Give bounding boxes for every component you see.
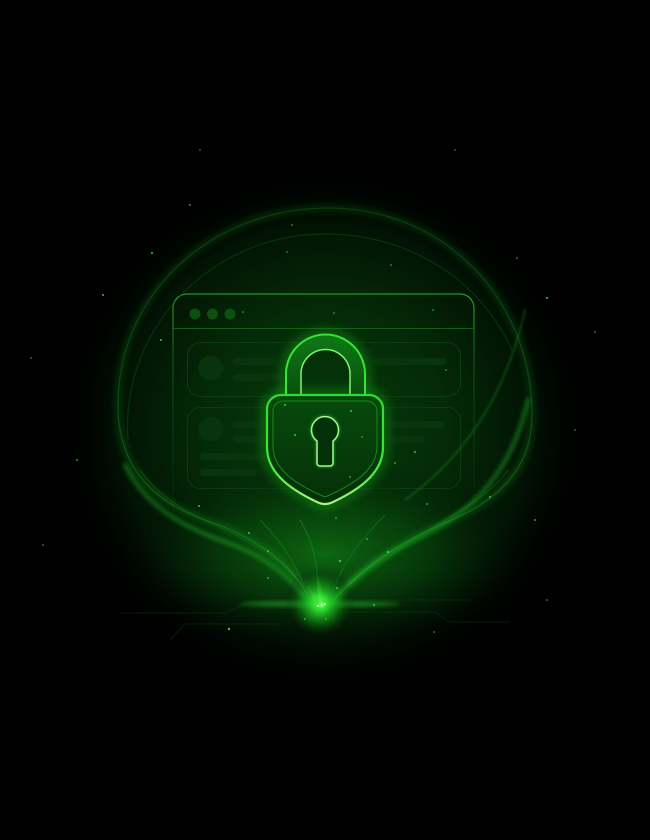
- energy bubble outline: [118, 208, 532, 602]
- shackle: [286, 335, 365, 395]
- circuit traces: [120, 600, 510, 640]
- light source at base of bubble: [240, 567, 400, 639]
- content card: bottom: [188, 408, 460, 488]
- window control dots: [190, 308, 236, 320]
- content card: top: [188, 342, 460, 396]
- particles: [30, 149, 596, 633]
- keyhole: [311, 417, 339, 466]
- lock body: [267, 395, 383, 504]
- lock halo: [267, 335, 383, 504]
- browser window: [173, 294, 474, 520]
- ambient green glow: [55, 160, 595, 700]
- padlock: [267, 335, 383, 504]
- sweeping light streaks: [125, 310, 528, 600]
